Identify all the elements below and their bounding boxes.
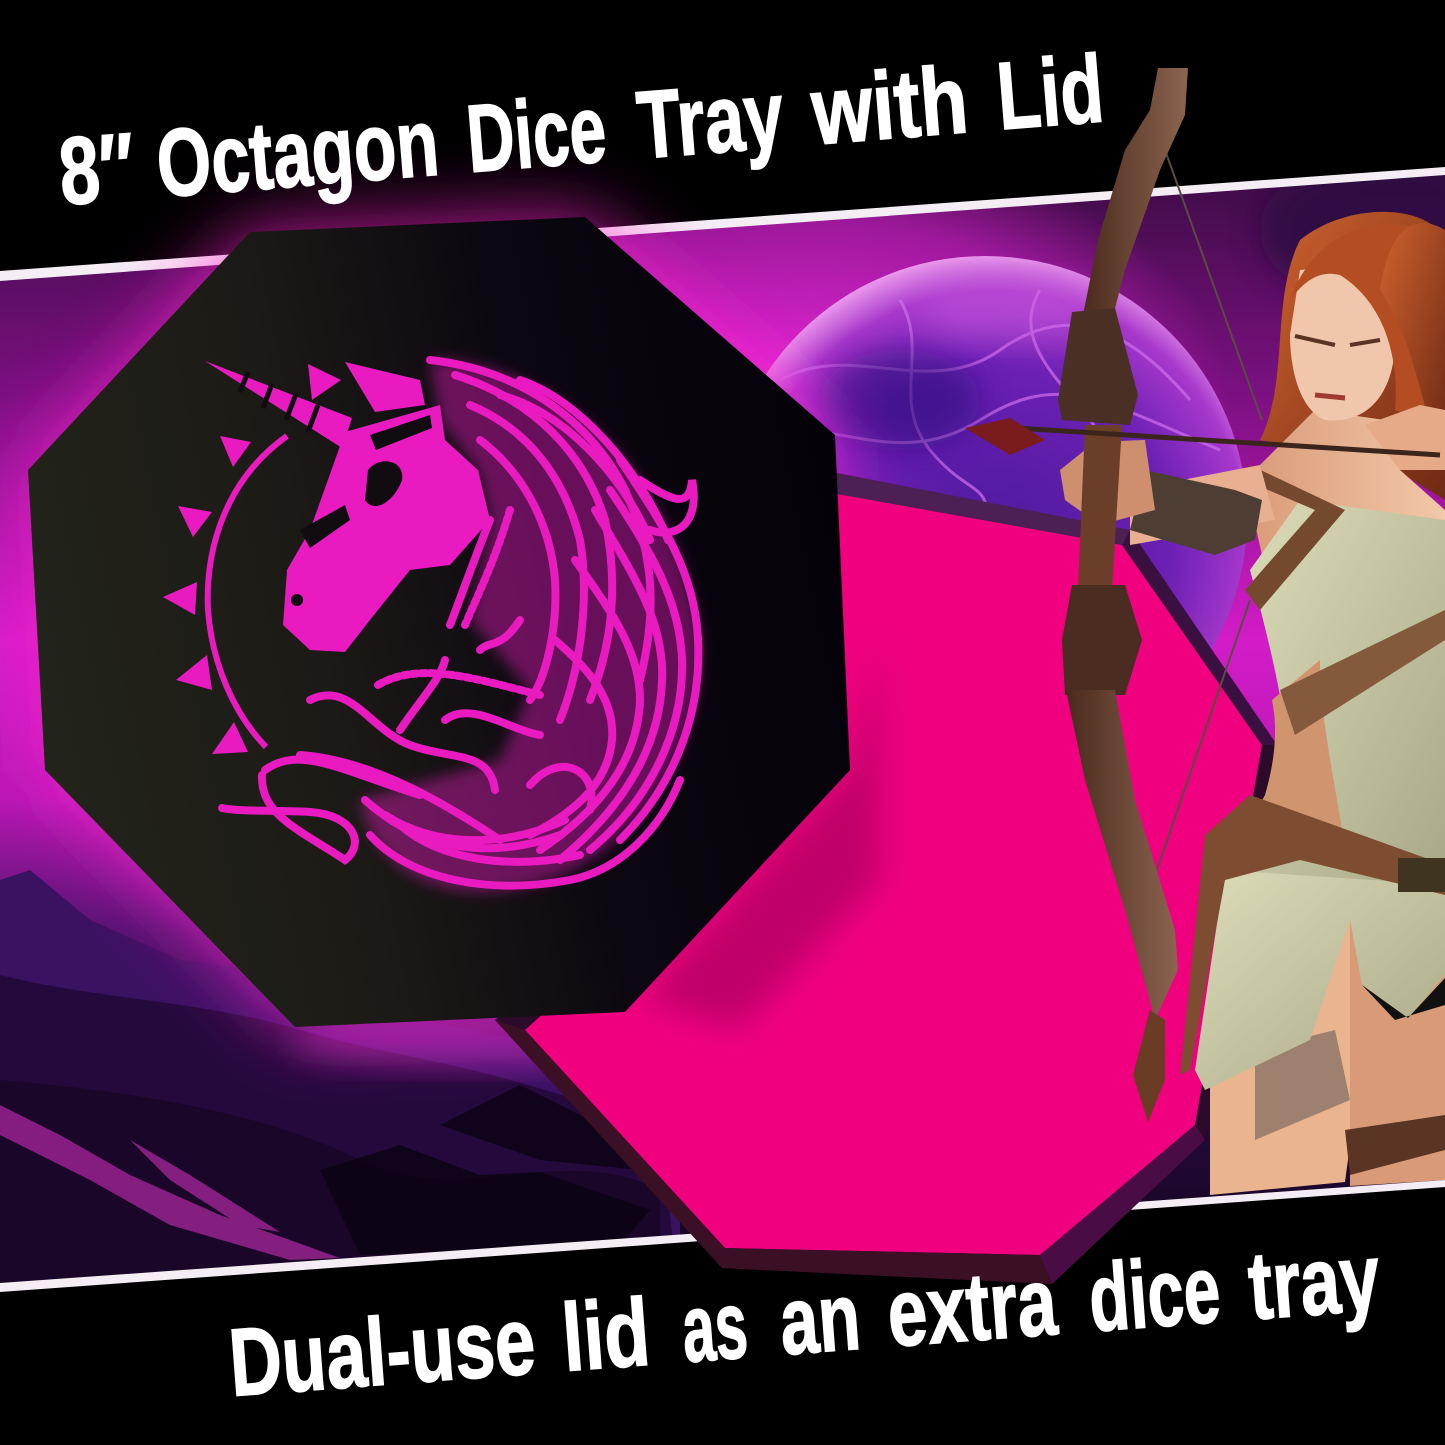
head <box>283 405 490 652</box>
title: Lid <box>993 35 1107 150</box>
garter <box>1255 1030 1350 1140</box>
belt <box>1180 795 1445 1075</box>
face <box>1290 269 1395 420</box>
title: Tray <box>633 61 787 179</box>
pulling hand <box>1365 405 1445 470</box>
torso <box>1240 500 1445 900</box>
unicorn emblem <box>163 360 700 892</box>
legs <box>1210 900 1368 1195</box>
subtitle: an <box>776 1263 864 1376</box>
mane strands <box>222 360 698 886</box>
title <box>55 35 1107 226</box>
hand <box>1060 440 1155 525</box>
drawing arm <box>1130 465 1275 545</box>
title: Octagon <box>153 89 442 218</box>
mane tone <box>360 360 700 892</box>
harness straps <box>1240 465 1345 610</box>
character: archer <box>965 68 1445 1195</box>
planet <box>766 256 1246 650</box>
bottom band border <box>0 1180 1445 1292</box>
subtitle: Dual-use <box>226 1287 539 1417</box>
tray shadow <box>640 640 880 1030</box>
title: 8″ <box>55 113 138 226</box>
back arm <box>1365 405 1445 470</box>
title: Dice <box>463 75 610 193</box>
panel: black octagon dice tray <box>28 217 850 1027</box>
panel: pink dice tray lid (open) <box>495 458 1277 1284</box>
skirt <box>1195 870 1445 1090</box>
emblem ring <box>208 436 287 747</box>
hair back <box>1260 212 1445 500</box>
hair front <box>1290 224 1445 420</box>
subtitle: extra <box>884 1248 1061 1367</box>
subtitle: tray <box>1245 1224 1383 1340</box>
ear <box>345 362 425 412</box>
waist skin <box>1240 660 1345 850</box>
thigh strap <box>1345 1115 1445 1175</box>
top band border <box>0 167 1445 281</box>
subtitle: lid <box>559 1279 653 1392</box>
distant hills <box>0 870 680 1235</box>
neck and shoulders <box>1245 410 1445 590</box>
title: with <box>807 46 972 165</box>
glow behind tray lid <box>28 217 850 1027</box>
emblem triangles <box>163 364 341 754</box>
subtitle <box>226 1224 1383 1417</box>
subtitle: as <box>678 1271 751 1383</box>
arrow <box>965 418 1440 455</box>
bow <box>1058 68 1188 1122</box>
subtitle: dice <box>1085 1236 1224 1352</box>
horn <box>205 361 352 448</box>
bow string <box>1150 150 1262 890</box>
bridle cut-outs <box>365 461 402 506</box>
bracer <box>1130 470 1262 555</box>
rocky foreground highlights <box>0 1105 340 1260</box>
